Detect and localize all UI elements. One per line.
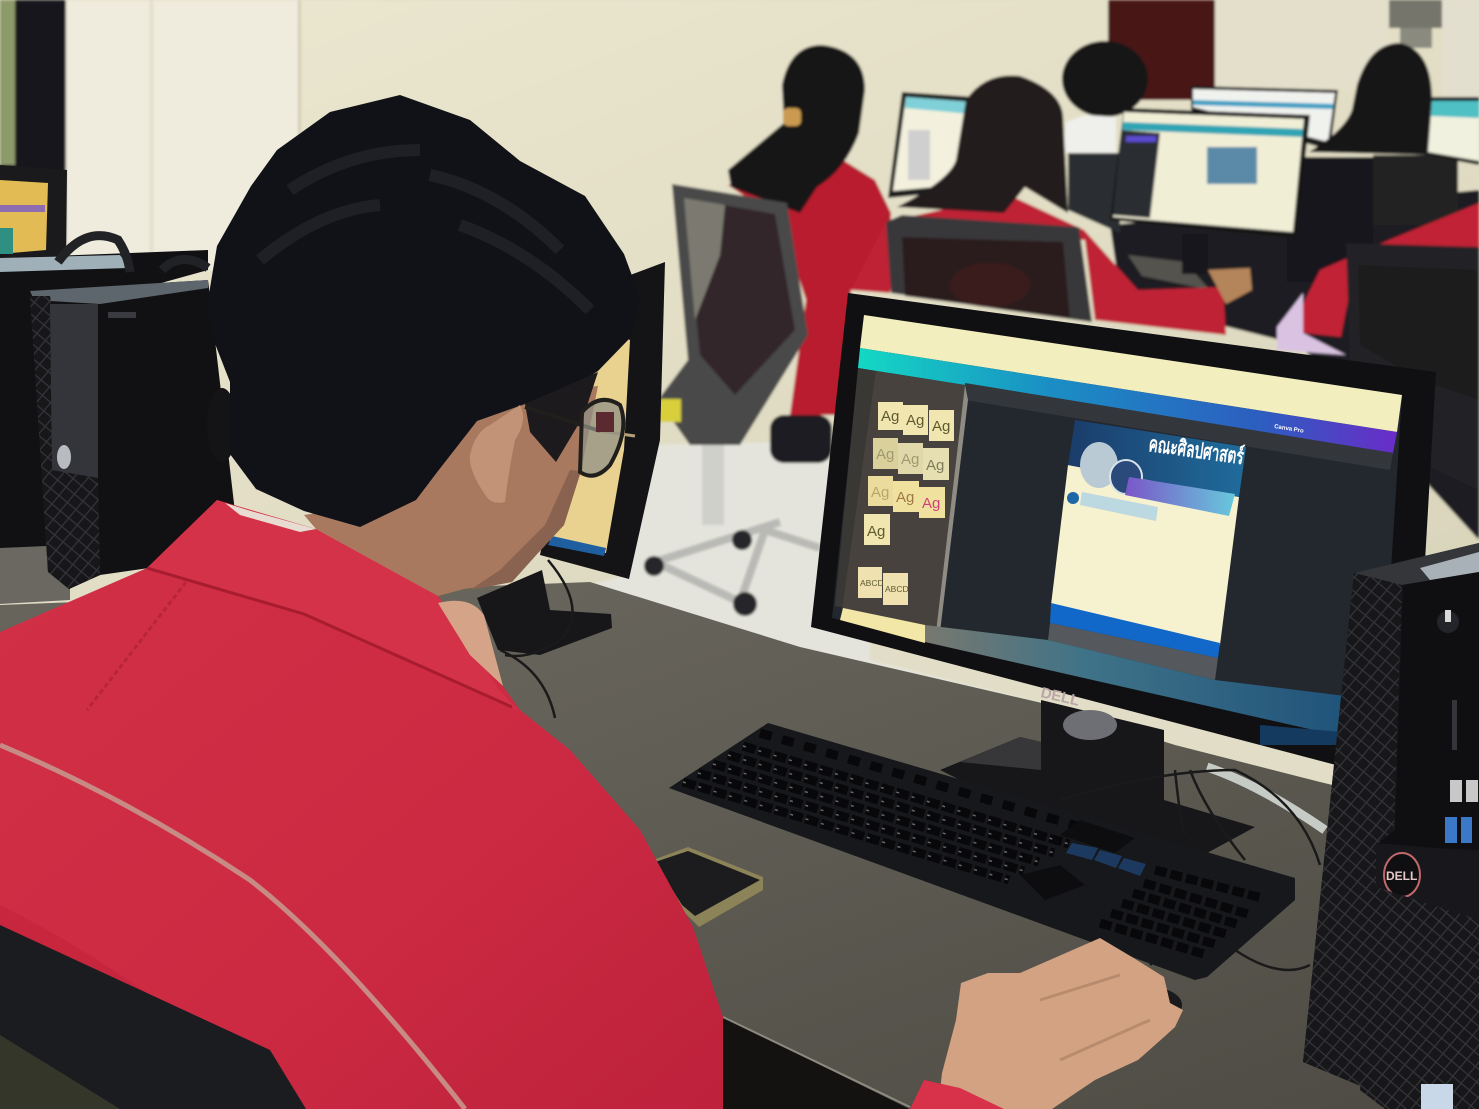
PC tower: right: [1303, 543, 1479, 1109]
student hand on mouse: [938, 938, 1183, 1109]
collar: [147, 500, 520, 712]
numeric keypad: [1100, 870, 1262, 955]
back wall: [0, 0, 1479, 600]
floor: [590, 440, 1042, 720]
background student: girl with long brown hair: [851, 76, 1252, 335]
neck and face: [304, 386, 598, 686]
PC tower: left: [30, 280, 240, 589]
shirt seam: [87, 582, 186, 710]
Thai heading on design: คณะศิลปศาสตร์: [1147, 431, 1246, 469]
background office chair: right: [1346, 243, 1479, 490]
editor options bar: [965, 383, 1393, 470]
foreground student: red shirt: [0, 500, 723, 1109]
desk front edge: [723, 1017, 910, 1109]
navigation keys: [1020, 820, 1146, 900]
font tiles: Ag: [867, 523, 885, 540]
background office chair: center: [886, 215, 1092, 322]
taskbar search box: [840, 608, 925, 643]
mobile phone: [653, 847, 763, 927]
USB ports: [1450, 780, 1462, 802]
hair: [208, 95, 641, 527]
glasses: [525, 400, 635, 476]
font tiles: ABCD: [885, 584, 909, 594]
background monitor: far right top: [1191, 86, 1338, 150]
background monitor: center: [1110, 108, 1310, 274]
key rows: [683, 733, 1084, 880]
canvas design page: [1048, 420, 1246, 680]
monitor stand: [940, 700, 1255, 853]
keyboard: [669, 723, 1295, 980]
font tiles: ABCD: [860, 578, 884, 588]
shirt cuff: [910, 1080, 1004, 1109]
side monitor stand: [477, 570, 612, 655]
font tiles: Ag: [881, 408, 899, 425]
blurred background of the room: [0, 0, 1479, 720]
left window and pale wall: [0, 0, 301, 280]
background student: right, dark hair: [1309, 43, 1432, 155]
back door and right wall fittings: [1108, 0, 1479, 100]
font tiles: Ag: [926, 457, 944, 474]
sideburn: [525, 372, 598, 462]
background student: girl with ponytail: [728, 45, 891, 415]
background desk row and towers: [1110, 155, 1479, 540]
font panel: [842, 371, 968, 632]
shirt seam piping: [0, 745, 465, 1109]
font tiles: Ag: [876, 446, 894, 463]
background office chair: left: [644, 184, 832, 616]
side grille: [1303, 573, 1416, 1109]
left tool rail: [835, 368, 876, 608]
background student: boy with dark hair: [1062, 41, 1148, 233]
browser tab bar: [860, 315, 1402, 432]
background monitor: far left: [888, 92, 975, 198]
processor sticker: [1421, 1084, 1453, 1109]
font tiles: Ag: [896, 489, 914, 506]
hair highlights: [260, 150, 590, 310]
collar fold line: [147, 568, 512, 707]
Dell tower badge: DELL: [1386, 869, 1417, 883]
font tiles: [858, 402, 954, 605]
lower grille: [1360, 887, 1479, 1109]
Dell logo on bezel: DELL: [1039, 684, 1081, 710]
white undershirt edge: [225, 503, 316, 532]
headset earcup: [207, 388, 237, 462]
toolbar label: Canva Pro: [1274, 424, 1304, 435]
main Dell monitor: [811, 293, 1436, 853]
background student: right, red jacket: [1277, 203, 1479, 355]
Canva toolbar gradient: [858, 348, 1397, 453]
main desk surface: [0, 582, 1479, 1109]
background monitor: right edge: [1425, 97, 1479, 165]
shirt shadow: [0, 905, 290, 1109]
Dell tower badge: [1376, 843, 1479, 920]
font tiles: Ag: [906, 412, 924, 429]
side monitor behind the student: [540, 262, 665, 579]
key legends: [683, 746, 1069, 880]
font tiles: Ag: [922, 495, 940, 512]
font tiles: Ag: [932, 418, 950, 435]
font tiles: Ag: [871, 484, 889, 501]
desk cables: [1060, 767, 1325, 970]
bottom status strip: [925, 625, 1380, 745]
monitor bezel: [811, 293, 1436, 785]
ear: [470, 405, 523, 503]
foreground chair: [0, 925, 306, 1109]
monitor screen: [832, 315, 1402, 745]
left foreground towers and back monitor: [0, 165, 208, 604]
font tiles: Ag: [901, 451, 919, 468]
side monitor cables: [500, 560, 572, 718]
taskbar tray: [1260, 725, 1380, 745]
tower top surface: [1354, 543, 1479, 585]
